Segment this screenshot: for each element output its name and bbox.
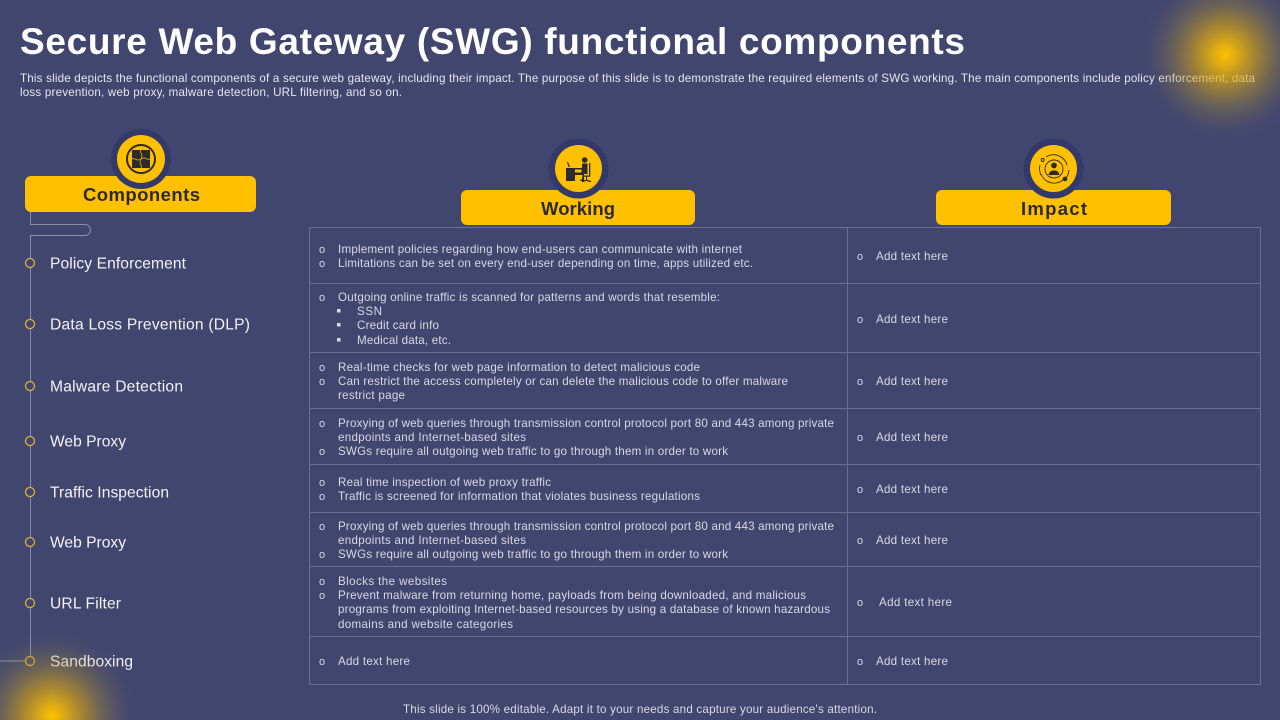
row 1: Add text here xyxy=(876,250,948,263)
row 1: Limitations can be set on every end-user depending on time, apps utilized etc. xyxy=(338,257,753,270)
row 5: Real time inspection of web proxy traffic xyxy=(338,476,551,489)
heading: working: Working xyxy=(541,198,615,219)
row 6: SWGs require all outgoing web traffic to go through them in order to work xyxy=(338,548,728,561)
row 3: Real-time checks for web page information to detect malicious code xyxy=(338,361,700,374)
row 2: o xyxy=(857,314,863,326)
heading: impact xyxy=(936,138,1171,225)
row 2: Credit card info xyxy=(357,319,439,332)
row 6 xyxy=(319,520,948,561)
row 4: Proxying of web queries through transmission control protocol port 80 and 443 among private xyxy=(338,417,834,430)
row 3: Can restrict the access completely or can delete the malicious code to offer malware xyxy=(338,375,788,388)
row 4: endpoints and Internet-based sites xyxy=(338,431,526,444)
row 4: o xyxy=(319,446,325,458)
heading: working xyxy=(461,138,695,225)
Web Proxy: Web Proxy xyxy=(50,434,126,450)
row 5: o xyxy=(319,477,325,489)
subtitle text block: loss prevention, web proxy, malware detection, URL filtering, and so on. xyxy=(20,86,402,99)
row 6: Proxying of web queries through transmission control protocol port 80 and 443 among private xyxy=(338,520,834,533)
footer note: This slide is 100% editable. Adapt it to your needs and capture your audience's attention. xyxy=(403,703,877,716)
row 1: Implement policies regarding how end-users can communicate with internet xyxy=(338,243,743,256)
glow: top right xyxy=(1137,0,1280,143)
icon: orbit with people xyxy=(1040,155,1069,183)
row 1: o xyxy=(319,258,325,270)
heading: components: Components xyxy=(83,184,200,205)
icon: person at desk xyxy=(566,157,591,182)
URL Filter: URL Filter xyxy=(50,596,121,612)
subtitle text block: This slide depicts the functional components of a secure web gateway, including their impact. The purpose of this slide is to demonstrate the required elements of SWG working. The main components include policy enforcement, data xyxy=(20,72,1256,85)
row 2 xyxy=(319,291,948,347)
row 7: domains and website categories xyxy=(338,618,513,631)
row 5: o xyxy=(319,491,325,503)
title: Secure Web Gateway (SWG) functional components xyxy=(20,21,965,62)
row 7 xyxy=(319,575,952,631)
row 7: Add text here xyxy=(879,596,952,609)
table xyxy=(310,228,1260,684)
row 4: o xyxy=(857,432,863,444)
row 8 xyxy=(319,655,948,668)
row 5: Add text here xyxy=(876,483,948,496)
heading: components xyxy=(25,129,256,212)
Sandboxing: Sandboxing xyxy=(50,654,133,670)
row 2: Outgoing online traffic is scanned for patterns and words that resemble: xyxy=(338,291,720,304)
row 1 xyxy=(319,243,948,270)
component timeline xyxy=(0,212,250,670)
row 2: Medical data, etc. xyxy=(357,334,451,347)
row 1: o xyxy=(319,244,325,256)
row 7: o xyxy=(857,597,863,609)
row 2: Add text here xyxy=(876,313,948,326)
row 1: o xyxy=(857,251,863,263)
row 6: Add text here xyxy=(876,534,948,547)
Traffic Inspection: Traffic Inspection xyxy=(50,484,169,502)
row 6: o xyxy=(319,549,325,561)
Web Proxy second: Web Proxy xyxy=(50,534,126,552)
row 8: Add text here xyxy=(338,655,410,668)
Malware Detection: Malware Detection xyxy=(50,378,183,396)
row 4: SWGs require all outgoing web traffic to go through them in order to work xyxy=(338,445,728,458)
row 7: o xyxy=(319,590,325,602)
row 3: restrict page xyxy=(338,389,405,402)
row 8: o xyxy=(319,656,325,668)
row 3 xyxy=(319,361,948,402)
row 4: o xyxy=(319,418,325,430)
Data Loss Prevention: Data Loss Prevention (DLP) xyxy=(50,316,250,334)
subtitle text block xyxy=(20,72,1256,99)
row 2: SSN xyxy=(357,305,382,318)
row 3: Add text here xyxy=(876,375,948,388)
row 4: Add text here xyxy=(876,431,948,444)
glow: bottom left xyxy=(0,628,140,720)
row 7: Blocks the websites xyxy=(338,575,447,588)
icon: puzzle xyxy=(127,145,155,173)
heading: impact: Impact xyxy=(1021,198,1087,219)
Policy Enforcement: Policy Enforcement xyxy=(50,256,187,272)
row 5 xyxy=(319,476,948,503)
row 7: Prevent malware from returning home, payloads from being downloaded, and malicious xyxy=(338,589,806,602)
row 3: o xyxy=(319,376,325,388)
row 3: o xyxy=(857,376,863,388)
row 5: o xyxy=(857,484,863,496)
row 8: Add text here xyxy=(876,655,948,668)
row 6: o xyxy=(319,521,325,533)
row 6: o xyxy=(857,535,863,547)
row 8: o xyxy=(857,656,863,668)
row 6: endpoints and Internet-based sites xyxy=(338,534,526,547)
row 7: programs from exploiting Internet-based resources by using a database of known hazardous xyxy=(338,603,830,616)
row 5: Traffic is screened for information that violates business regulations xyxy=(338,490,700,503)
row 7: o xyxy=(319,576,325,588)
row 3: o xyxy=(319,362,325,374)
row 4 xyxy=(319,417,948,458)
row 2: o xyxy=(319,292,325,304)
